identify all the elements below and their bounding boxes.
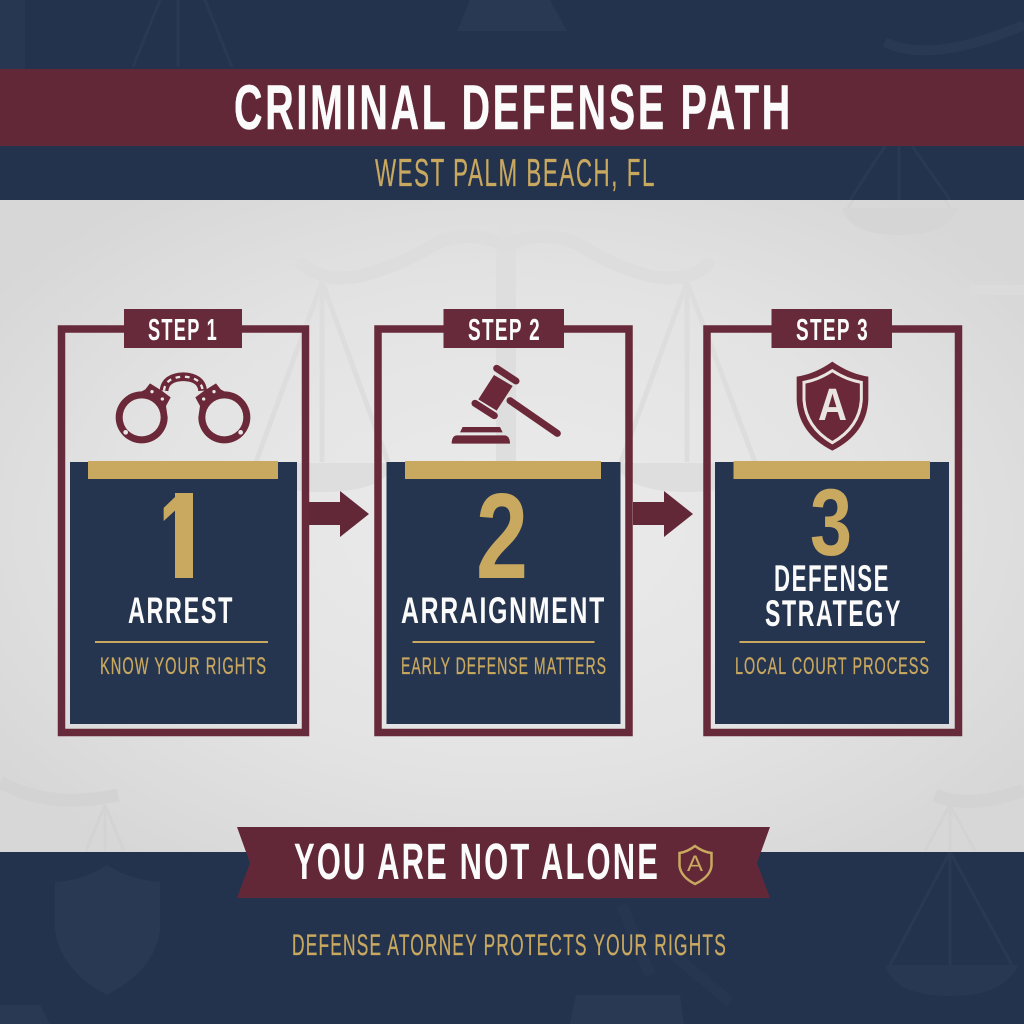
footer tagline: DEFENSE ATORNEY PROTECTS YOUR RIGHTS — [292, 929, 727, 962]
heading defense strategy: STRATEGY — [765, 593, 902, 634]
icon: handcuffs — [116, 377, 250, 443]
numeral 1 — [164, 493, 193, 578]
ribbon: you are not alone — [237, 827, 770, 898]
step 2 tag: STEP 2 — [468, 312, 541, 347]
step 1 tag: STEP 1 — [148, 312, 218, 347]
step 2 tag — [444, 309, 564, 348]
heading defense strategy — [765, 558, 902, 634]
ribbon: you are not alone: YOU ARE NOT ALONE — [294, 833, 660, 890]
icon: small gold shield — [680, 846, 712, 884]
numeral 1: 1 — [158, 468, 204, 604]
watermark: side scales on light panel — [0, 200, 1024, 851]
background: light central panel — [0, 200, 1024, 852]
icon: shield — [797, 362, 868, 451]
arrow 2 — [633, 491, 693, 537]
panel: step 3 defense strategy — [707, 309, 958, 732]
title band — [0, 69, 1024, 146]
icon: gavel — [452, 368, 557, 444]
numeral 2: 2 — [476, 468, 528, 604]
footer navy band — [0, 852, 1024, 1024]
heading defense strategy: DEFENSE — [774, 558, 890, 599]
heading arrest: ARREST — [128, 590, 234, 631]
watermark: central scales of justice — [250, 215, 760, 492]
panel: step 2 arraignment — [378, 309, 629, 732]
caption early defense matters: EARLY DEFENSE MATTERS — [401, 653, 607, 680]
step 3 tag — [772, 309, 892, 348]
navy card 1 — [70, 461, 297, 724]
icon: small gold shield: A — [687, 851, 703, 876]
navy card 2 — [386, 461, 620, 724]
caption know your rights: KNOW YOUR RIGHTS — [100, 653, 267, 680]
numeral 3: 3 — [810, 470, 852, 576]
header navy band — [0, 0, 1024, 200]
navy card 3 — [715, 461, 949, 724]
icon: shield: A — [818, 379, 847, 430]
step 3 tag: STEP 3 — [796, 312, 869, 347]
panel: step 1 arrest — [62, 309, 306, 732]
heading arraignment: ARRAIGNMENT — [401, 590, 606, 631]
arrow 1 — [309, 491, 369, 537]
step 1 tag — [124, 309, 242, 348]
subtitle: WEST PALM BEACH, FL — [375, 152, 656, 195]
